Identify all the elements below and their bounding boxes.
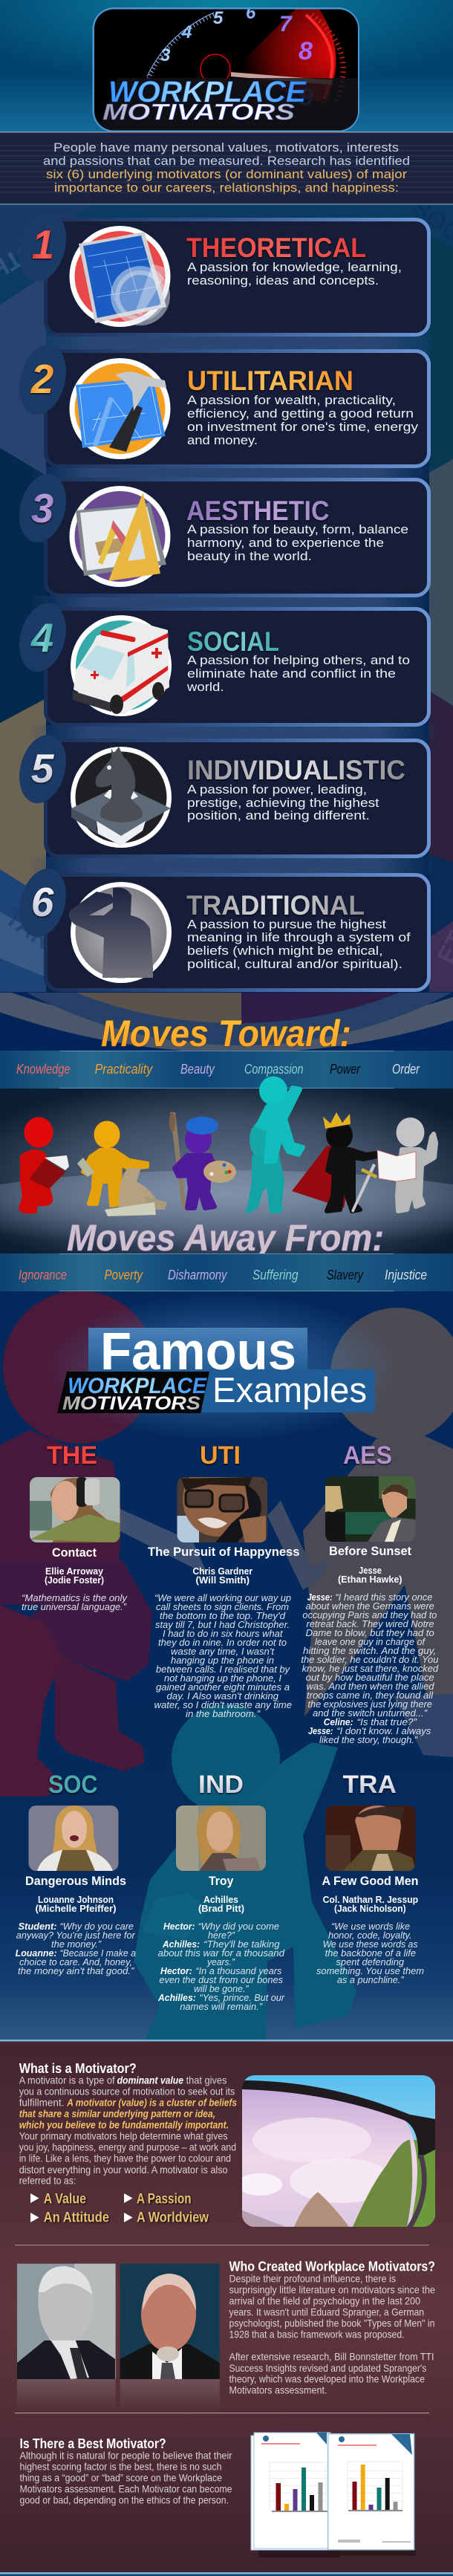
- away words: [19, 1268, 427, 1282]
- toward words: Power: [330, 1062, 361, 1077]
- photo: rose tinted glasses: [238, 2075, 435, 2227]
- quote: We use these words as: [323, 1939, 418, 1950]
- intro text: and passions that can be measured. Research has identified: [43, 155, 410, 168]
- badge: workplace motivators: WORKPLACE: [68, 1374, 207, 1398]
- character: [323, 1895, 418, 1914]
- toward words: Compassion: [244, 1062, 303, 1077]
- gauge: 8: [299, 37, 313, 65]
- column: tra: [316, 1771, 424, 1985]
- quote: I had to do in six hours what: [163, 1629, 283, 1639]
- away words: Disharmony: [168, 1268, 227, 1282]
- column: the: THE: [47, 1441, 97, 1470]
- description: world.: [186, 680, 224, 694]
- panel 2: utilitarian: [12, 340, 428, 467]
- number 4: [12, 598, 74, 677]
- column: soc: [16, 1771, 136, 1976]
- movie title: Dangerous Minds: [25, 1875, 126, 1888]
- gaps between panels: [30, 336, 438, 875]
- number 4: 4: [30, 614, 53, 661]
- quote: “Because I make a: [59, 1948, 136, 1959]
- title: SOCIAL: [187, 626, 279, 657]
- intro text: importance to our careers, relationships, and happiness:: [54, 181, 399, 195]
- panel 6: traditional: [12, 863, 429, 990]
- toward words: Knowledge: [16, 1062, 70, 1077]
- toward words: [16, 1062, 420, 1077]
- title: THEORETICAL: [186, 233, 366, 263]
- movie title: The Pursuit of Happyness: [148, 1545, 300, 1559]
- title: INDIVIDUALISTIC: [187, 755, 405, 785]
- character: [338, 1566, 403, 1585]
- quote: honor, code, loyalty.: [328, 1930, 411, 1941]
- body: dominant value: [117, 2074, 183, 2086]
- gauge: 9: [299, 83, 313, 111]
- character: (Jack Nicholson): [334, 1904, 406, 1914]
- logo panel: [92, 3, 359, 132]
- body: which you believe to be fundamentally important.: [19, 2119, 229, 2131]
- quote: “We were all working our way up: [154, 1593, 291, 1603]
- character: (Ethan Hawke): [338, 1574, 403, 1585]
- quote: anyway? You're just here for: [16, 1930, 136, 1941]
- character: Achilles: [203, 1895, 238, 1905]
- body: fulfillment.: [19, 2097, 64, 2109]
- logo wordmark: MOTIVATORS: [102, 99, 295, 125]
- quote: Achilles:: [157, 1993, 196, 2003]
- quote: out by how beautiful the place: [306, 1673, 434, 1683]
- heading: Is There a Best Motivator?: [19, 2436, 166, 2451]
- character: [193, 1566, 252, 1586]
- character: (Jodie Foster): [45, 1575, 104, 1586]
- description: [187, 522, 408, 563]
- body: arrival of the field of psychology in the last 200: [229, 2295, 420, 2307]
- number 5: 5: [31, 745, 55, 791]
- panel 4: social: [12, 598, 429, 725]
- body: A motivator (value) is a cluster of beliefs: [66, 2097, 237, 2109]
- column: uti: UTI: [200, 1441, 241, 1470]
- famous examples title: Examples: [212, 1370, 367, 1409]
- quote: here?”: [208, 1930, 235, 1941]
- header background: [0, 0, 453, 134]
- heading: moves away from: Moves Away From:: [67, 1217, 384, 1259]
- is there a best motivator: [19, 2433, 416, 2557]
- quote: “Is that true?”: [356, 1717, 417, 1727]
- logo wordmark: [102, 76, 307, 125]
- quote: troops came in, they found all: [307, 1690, 434, 1701]
- quote: know, he just sat there, knocked: [302, 1664, 439, 1674]
- quote: Jesse:: [307, 1592, 333, 1603]
- character: [45, 1566, 104, 1586]
- intro text: six (6) underlying motivators (or dominant values) of major: [46, 168, 408, 181]
- bullet list: [30, 2192, 209, 2226]
- column: tra: TRA: [343, 1771, 397, 1799]
- body: Motivators assessment. Each Motivator can become: [19, 2483, 232, 2495]
- description: eliminate hate and conflict in the: [187, 666, 396, 681]
- movie title: Troy: [209, 1875, 234, 1888]
- moves away band: [0, 1253, 453, 1291]
- quote: Celine:: [324, 1717, 353, 1727]
- description: [187, 782, 379, 823]
- body: years. It wasn't until Eduard Spranger, a German: [229, 2306, 424, 2318]
- body: thing as a “good” or “bad” score on the Workplace: [19, 2472, 222, 2484]
- quote: Dame to blow, but they had to: [306, 1628, 434, 1638]
- photo: a few good men: [325, 1806, 416, 1871]
- description: harmony, and to experience the: [187, 536, 384, 550]
- famous examples title: [45, 1293, 401, 1441]
- wheel background: [0, 205, 453, 1051]
- portrait: eduard spranger: [17, 2264, 116, 2411]
- quote: was. And then when the allied: [306, 1681, 435, 1692]
- icon: saluting soldier: [69, 882, 172, 983]
- quote: about when the Germans were: [306, 1601, 434, 1612]
- body: [19, 2074, 237, 2186]
- toward words: Order: [392, 1062, 420, 1077]
- description: beauty in the world.: [187, 549, 312, 563]
- body: theory, which was developed into the Workplace: [229, 2373, 425, 2385]
- figures stage background: [0, 1089, 453, 1267]
- away words: Ignorance: [19, 1268, 67, 1282]
- movie title: Before Sunset: [329, 1545, 412, 1558]
- quote: they do in nine. In order not to: [158, 1638, 287, 1648]
- badge: workplace motivators: MOTIVATORS: [62, 1393, 201, 1414]
- photo: troy: [176, 1806, 267, 1871]
- title: UTILITARIAN: [187, 366, 353, 396]
- quote: the backbone of a life: [325, 1948, 416, 1959]
- figure: black king: [292, 1112, 377, 1213]
- bullet list: A Value: [44, 2192, 86, 2207]
- figure: yellow with money: [77, 1120, 167, 1216]
- number 5: [12, 730, 74, 808]
- quote: retreat back. They wired Notre: [306, 1619, 434, 1629]
- character: [36, 1895, 116, 1914]
- description: position, and being different.: [187, 808, 370, 823]
- quote: names will remain.”: [180, 2002, 263, 2012]
- figure: teal pair: [248, 1076, 303, 1211]
- quote: “Why did you come: [198, 1921, 279, 1932]
- column: ind: IND: [198, 1771, 244, 1799]
- bullet list: An Attitude: [44, 2210, 109, 2226]
- quote: occupying Paris and they had to: [302, 1610, 437, 1620]
- who created workplace motivators: [17, 2259, 435, 2411]
- column: the: [22, 1441, 128, 1612]
- panel 5: individualistic: [12, 730, 429, 856]
- body: that gives: [186, 2074, 226, 2086]
- quote: [316, 1921, 424, 1985]
- body: Although it is natural for people to believe that their: [19, 2449, 232, 2461]
- quote: liked the story, though.”: [319, 1735, 418, 1745]
- away words: Suffering: [252, 1268, 299, 1282]
- intro text: People have many personal values, motivators, interests: [53, 141, 399, 155]
- body: Your primary motivators help determine what gives: [19, 2130, 228, 2142]
- icon: drafting triangle: [70, 486, 171, 587]
- body: Motivators assessment.: [229, 2384, 327, 2396]
- report: back sheet: [251, 2433, 340, 2557]
- toward words: Practicality: [95, 1062, 153, 1077]
- body: in life. Like a lens, they have the power to colour and: [19, 2152, 231, 2164]
- quote: “They'll be talking: [203, 1939, 280, 1950]
- body: After extensive research, Bill Bonnstetter from TTI: [229, 2351, 434, 2363]
- icon: hammer and blueprint: [70, 358, 171, 459]
- portrait: bill bonnstetter: [120, 2264, 220, 2411]
- column: aes: [301, 1441, 439, 1745]
- quote: about this war for a thousand: [157, 1948, 285, 1959]
- character: Ellie Arroway: [45, 1566, 103, 1577]
- description: beliefs (which might be ethical,: [187, 944, 383, 958]
- photo: dangerous minds: [28, 1806, 119, 1871]
- body: surprisingly little literature on motivators since the: [229, 2284, 435, 2296]
- description: A passion for power, leading,: [187, 782, 367, 797]
- movie title: Contact: [52, 1546, 97, 1560]
- bullet list: A Passion: [137, 2192, 192, 2207]
- quote: water, so I didn't waste any time: [154, 1700, 292, 1710]
- description: [187, 260, 402, 288]
- quote: the money ain't that good.”: [18, 1966, 134, 1976]
- body: you a continuous source of motivation to seek out its: [19, 2086, 235, 2098]
- badge: workplace motivators: [57, 1372, 209, 1414]
- number 3: [12, 469, 74, 548]
- character: Jesse: [359, 1566, 382, 1576]
- panel 1: theoretical: [12, 207, 428, 334]
- body: [19, 2449, 232, 2505]
- quote: [22, 1593, 128, 1612]
- photo: before sunset: [324, 1476, 416, 1542]
- icon: chess knight: [71, 747, 172, 848]
- quote: “I don't know. I always: [336, 1726, 431, 1736]
- character: Col. Nathan R. Jessup: [323, 1895, 418, 1905]
- description: on investment for one's time, energy: [187, 420, 419, 434]
- quote: something. You use them: [316, 1966, 424, 1976]
- quote: “Why do you care: [59, 1921, 134, 1932]
- description: A passion for helping others, and to: [187, 653, 410, 667]
- description: political, cultural and/or spiritual).: [187, 957, 403, 971]
- number 1: [12, 207, 74, 287]
- quote: not hanging up the phone, I: [164, 1673, 282, 1684]
- title: TRADITIONAL: [186, 890, 365, 921]
- quote: Hector:: [163, 1921, 195, 1932]
- ghost figure: red: [0, 1291, 156, 1797]
- quote: the money.”: [51, 1939, 102, 1950]
- quote: the soldier, he couldn't do it. You: [301, 1655, 438, 1665]
- column: uti: [148, 1441, 300, 1719]
- quote: gained another eight minutes a: [156, 1682, 290, 1693]
- quote: call sheets to sign clients. From: [156, 1602, 289, 1612]
- body: referred to as:: [19, 2174, 76, 2186]
- description: [186, 653, 410, 694]
- body: 1928 that a basic framework was proposed.: [229, 2329, 404, 2340]
- number 2: 2: [30, 356, 54, 402]
- number 6: [12, 863, 74, 942]
- quote: will be gone.”: [194, 1984, 249, 1994]
- away words: Slavery: [327, 1268, 364, 1282]
- quote: as a punchline.”: [337, 1975, 404, 1985]
- title: AESTHETIC: [186, 496, 330, 526]
- quote: hitting the switch. And the guy,: [303, 1646, 436, 1656]
- gauge: 3: [160, 45, 171, 65]
- description: prestige, achieving the highest: [187, 796, 379, 810]
- wheel lettering: [0, 193, 453, 969]
- column: aes: AES: [343, 1441, 392, 1470]
- character: (Michelle Pfeiffer): [36, 1904, 116, 1914]
- quote: between calls. I realised that by: [156, 1664, 290, 1675]
- quote: Student:: [18, 1921, 56, 1932]
- body: good or bad, depending on the ethics of the person.: [19, 2494, 229, 2505]
- quote: choice to care. And, honey,: [19, 1957, 132, 1967]
- description: reasoning, ideas and concepts.: [187, 273, 379, 288]
- quote: “Mathematics is the only: [22, 1593, 128, 1603]
- gauge: 6: [246, 3, 256, 23]
- quote: Jesse:: [308, 1726, 333, 1736]
- quote: “In a thousand years: [195, 1966, 281, 1976]
- quote: Achilles:: [162, 1939, 200, 1950]
- description: A passion for wealth, practicality,: [187, 393, 396, 407]
- gauge: 7: [279, 12, 293, 36]
- gauge: [98, 3, 358, 132]
- column: soc: SOC: [48, 1771, 98, 1799]
- heading: What is a Motivator?: [19, 2060, 137, 2076]
- quote: leave one guy in charge of: [315, 1637, 426, 1647]
- ghost figure: gray: [119, 1308, 453, 1757]
- quote: “I heard this story once: [335, 1592, 432, 1603]
- heading: moves toward: Moves Toward:: [101, 1013, 351, 1054]
- report: front sheet: [328, 2434, 416, 2556]
- quote: Louanne:: [16, 1948, 57, 1959]
- description: A passion to pursue the highest: [187, 917, 386, 932]
- movie title: A Few Good Men: [322, 1875, 419, 1888]
- number 3: 3: [31, 485, 53, 531]
- quote: true universal language.”: [22, 1602, 127, 1612]
- logo wordmark: WORKPLACE: [108, 76, 307, 108]
- quote: “We use words like: [331, 1921, 410, 1932]
- body: distort everything in your world. A motivator is also: [19, 2164, 228, 2176]
- what is a motivator: [19, 2060, 435, 2227]
- body: [229, 2273, 435, 2396]
- quote: in the bathroom.”: [186, 1709, 261, 1719]
- description: A passion for knowledge, learning,: [187, 260, 402, 274]
- quote: [16, 1921, 136, 1976]
- photo: pursuit of happyness: [177, 1477, 267, 1542]
- quote: the bottom to the top. They'd: [160, 1611, 286, 1621]
- wheel lettering: TAR: [0, 903, 56, 955]
- icon: blueprint and protractor: [70, 226, 171, 327]
- quote: even the dust from our bones: [159, 1975, 283, 1985]
- character: (Brad Pitt): [198, 1904, 244, 1914]
- quote: spent defending: [336, 1957, 404, 1967]
- quote: the explosives just lying there: [307, 1699, 432, 1710]
- character: [198, 1895, 244, 1914]
- icon: ambulance: [71, 615, 172, 716]
- moves toward band: [0, 1051, 453, 1089]
- body: highest scoring factor is the best, there is no such: [19, 2461, 221, 2473]
- description: [187, 393, 419, 447]
- number 1: 1: [32, 221, 54, 267]
- number 6: 6: [31, 879, 54, 925]
- panel 3: aesthetic: [12, 469, 429, 596]
- description: meaning in life through a system of: [187, 930, 411, 944]
- photo: contact: [30, 1477, 120, 1542]
- quote: stay till 7, but I had Christopher.: [155, 1620, 290, 1630]
- body: that share a similar underlying pattern or idea,: [19, 2108, 215, 2120]
- quote: waste any time, I wasn't: [171, 1647, 275, 1657]
- away words: Poverty: [104, 1268, 143, 1282]
- column: ind: [157, 1771, 285, 2012]
- maroon section background: [0, 2040, 453, 2576]
- intro strip: [0, 132, 453, 205]
- toward words: Beauty: [180, 1062, 215, 1077]
- quote: [301, 1592, 439, 1745]
- description: and money.: [187, 433, 258, 447]
- quote: [154, 1593, 292, 1719]
- quote: “Yes, prince. But our: [199, 1993, 285, 2003]
- figure: white with open book: [377, 1117, 436, 1211]
- gauge: 4: [181, 22, 192, 42]
- character: Louanne Johnson: [38, 1895, 114, 1905]
- famous examples title: Famous: [100, 1323, 296, 1381]
- ghost figure: teal: [134, 1704, 356, 2040]
- quote: hanging up the phone in: [171, 1655, 274, 1666]
- description: [187, 917, 411, 971]
- description: efficiency, and getting a good return: [187, 406, 414, 421]
- quote: Hector:: [160, 1966, 192, 1976]
- quote: years.”: [206, 1957, 235, 1967]
- number 2: [12, 340, 74, 420]
- figure: red with book: [21, 1117, 69, 1211]
- body: Success Insights revised and updated Spranger's: [229, 2362, 426, 2374]
- bullet list: A Worldview: [137, 2210, 209, 2226]
- gauge: 5: [213, 8, 224, 28]
- quote: day. I Also wasn't drinking: [166, 1691, 278, 1701]
- quote: [157, 1921, 285, 2012]
- character: (Will Smith): [196, 1575, 250, 1586]
- intro text: [43, 141, 410, 195]
- figure: purple artist: [169, 1112, 236, 1209]
- body: Despite their profound influence, there is: [229, 2273, 396, 2285]
- away words: Injustice: [385, 1268, 427, 1282]
- famous section background: [0, 1291, 453, 2040]
- character: Chris Gardner: [193, 1566, 252, 1577]
- body: A motivator is a type of: [19, 2074, 115, 2086]
- quote: and the switch unturned...”: [313, 1708, 428, 1719]
- description: A passion for beauty, form, balance: [187, 522, 408, 536]
- body: you joy, happiness, energy and purpose – at work and: [19, 2141, 236, 2153]
